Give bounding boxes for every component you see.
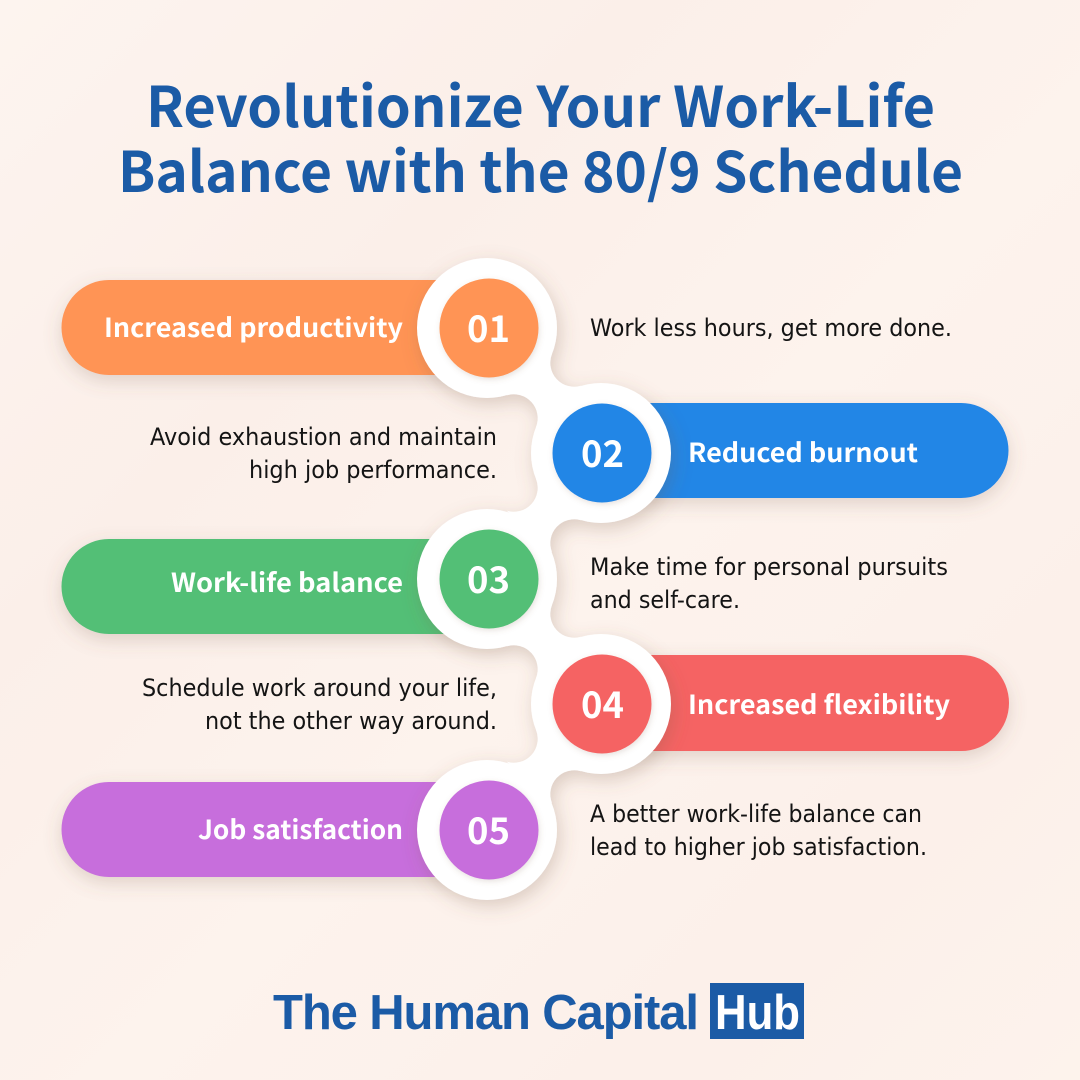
step 05 badge: [440, 780, 538, 880]
description 02: high job performance.: [249, 456, 497, 484]
step 02 badge: 02: [581, 424, 624, 478]
label: reduced burnout: Reduced burnout: [688, 433, 918, 470]
step 05 badge: 05: [467, 801, 510, 855]
description 05: A better work-life balance can: [590, 800, 922, 828]
description 05: [590, 800, 927, 861]
pill: work-life balance: [62, 539, 500, 634]
label: job satisfaction: Job satisfaction: [198, 810, 403, 847]
logo: The Human Capital Hub: Hub: [715, 986, 800, 1040]
label: increased productivity: Increased productivity: [104, 308, 403, 345]
step 04 badge: [552, 654, 652, 754]
title: Revolutionize Your Work-Life: [146, 63, 935, 144]
pill: increased flexibility: [600, 655, 1009, 751]
white connector ribbon: [417, 258, 671, 900]
step 03 badge: 03: [467, 550, 510, 604]
step 04 badge: 04: [581, 675, 624, 729]
description 02: Avoid exhaustion and maintain: [150, 423, 497, 451]
title: [118, 63, 963, 209]
label: increased flexibility: Increased flexibility: [688, 685, 950, 722]
description 04: [142, 674, 497, 735]
step 02 badge: [552, 404, 652, 502]
step 01 badge: 01: [467, 299, 510, 353]
description 05: lead to higher job satisfaction.: [590, 833, 927, 861]
title: Balance with the 80/9 Schedule: [118, 128, 963, 209]
pill: reduced burnout: [600, 403, 1009, 498]
step 01 badge: [440, 278, 538, 378]
description 03: Make time for personal pursuits: [590, 553, 948, 581]
logo: The Human Capital Hub: The Human Capital: [273, 986, 699, 1040]
pill: increased productivity: [62, 280, 500, 375]
description 02: [150, 423, 497, 484]
description 04: not the other way around.: [205, 707, 497, 735]
label: work-life balance: Work-life balance: [171, 563, 403, 600]
pill: job satisfaction: [62, 782, 500, 877]
description 04: Schedule work around your life,: [142, 674, 497, 702]
description 03: and self-care.: [590, 586, 740, 614]
step 03 badge: [440, 530, 538, 628]
description 01: Work less hours, get more done.: [590, 314, 952, 342]
description 03: [590, 553, 948, 614]
